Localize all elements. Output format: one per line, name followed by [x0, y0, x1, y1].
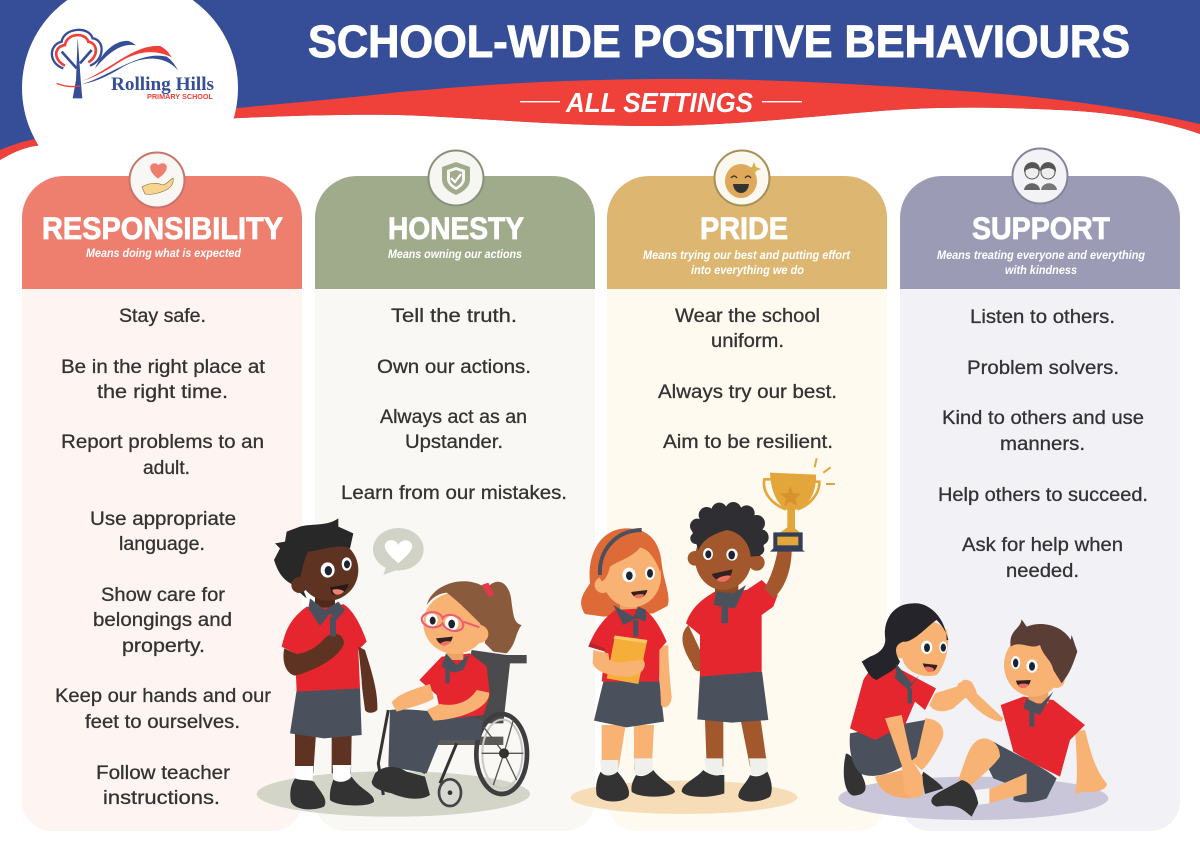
girl	[372, 581, 522, 799]
behaviour list: adult.	[143, 457, 190, 479]
behaviour list	[658, 305, 837, 453]
icon: trophy	[764, 458, 835, 552]
behaviour list: Report problems to an	[61, 431, 264, 453]
behaviour list: Wear the school	[675, 305, 820, 327]
curly hair	[690, 502, 769, 557]
icon: shield	[428, 150, 484, 206]
behaviour list: Always act as an	[380, 406, 527, 428]
title: SCHOOL-WIDE POSITIVE BEHAVIOURS	[308, 16, 1130, 67]
icon: hand and heart	[130, 152, 184, 208]
behaviour list: Problem solvers.	[967, 357, 1119, 379]
illustration: girl helping boy	[838, 603, 1108, 820]
heading: PRIDE	[700, 210, 788, 246]
behaviour list: feet to ourselves.	[85, 711, 240, 733]
logo name: Rolling Hills	[111, 75, 214, 95]
behaviour list: Aim to be resilient.	[663, 431, 833, 453]
panel: honesty	[315, 150, 595, 831]
description: Means treating everyone and everything	[937, 250, 1145, 262]
header banner	[0, 0, 1200, 160]
behaviour list: language.	[119, 533, 205, 555]
behaviour list: manners.	[1000, 433, 1085, 455]
heading: RESPONSIBILITY	[42, 210, 283, 246]
description: Means trying our best and putting effort	[643, 250, 851, 262]
behaviour list: Own our actions.	[377, 356, 531, 378]
description: Means owning our actions	[388, 249, 522, 261]
behaviour list: Be in the right place at	[61, 356, 266, 378]
boy with trophy	[682, 502, 792, 802]
behaviour list: Help others to succeed.	[938, 484, 1148, 506]
icon: heart speech bubble	[373, 528, 424, 575]
illustration: girl with book and boy with trophy	[571, 458, 835, 814]
behaviour list: Show care for	[101, 584, 226, 606]
sitting boy	[931, 619, 1107, 817]
panel: pride	[607, 150, 887, 831]
kneeling girl	[844, 603, 974, 798]
behaviour list: Follow teacher	[96, 762, 231, 784]
panel: pride: into everything we do	[691, 265, 804, 277]
behaviour list	[55, 305, 272, 809]
school logo	[52, 30, 178, 98]
behaviour list: Stay safe.	[119, 305, 206, 327]
girl with book	[581, 528, 675, 801]
behaviour list: Use appropriate	[90, 508, 236, 530]
behaviour list: uniform.	[711, 330, 784, 352]
behaviour list: Kind to others and use	[942, 407, 1144, 429]
heading: HONESTY	[388, 210, 524, 246]
logo badge	[22, 0, 238, 196]
behaviour list: Learn from our mistakes.	[341, 482, 567, 504]
wheelchair	[378, 650, 527, 806]
logo subtitle: PRIMARY SCHOOL	[147, 94, 214, 101]
icon: smiling face	[714, 150, 770, 206]
description: Means doing what is expected	[86, 248, 242, 260]
behaviour list: Listen to others.	[970, 306, 1115, 328]
subtitle: all settings: ALL SETTINGS	[565, 87, 753, 118]
behaviour list: Ask for help when	[962, 534, 1123, 556]
behaviour list: Tell the truth.	[391, 305, 517, 327]
boy	[274, 518, 377, 809]
behaviour list: Keep our hands and our	[55, 685, 272, 707]
behaviour list: belongings and	[93, 609, 232, 631]
behaviour list: needed.	[1006, 560, 1079, 582]
heading: SUPPORT	[972, 210, 1110, 246]
behaviour list: instructions.	[103, 787, 220, 809]
illustration: boy and girl in wheelchair	[257, 518, 530, 817]
panel: support: with kindness	[1005, 265, 1077, 277]
behaviour list: property.	[122, 635, 205, 657]
behaviour list	[938, 306, 1148, 582]
behaviour list: Upstander.	[405, 431, 503, 453]
behaviour list: Always try our best.	[658, 381, 837, 403]
panel: responsibility	[22, 152, 302, 831]
behaviour list: the right time.	[97, 381, 228, 403]
behaviour list	[341, 305, 567, 504]
icon: two friends	[1012, 148, 1068, 204]
panel: support	[900, 148, 1180, 831]
